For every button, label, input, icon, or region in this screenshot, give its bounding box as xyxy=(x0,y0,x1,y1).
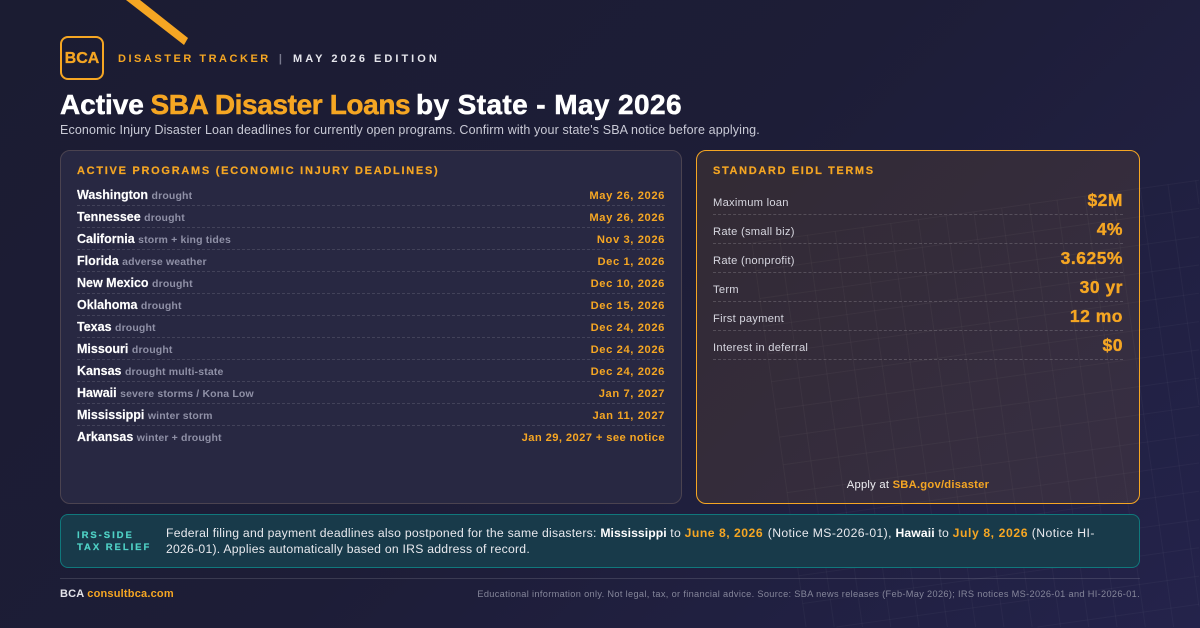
row: Washington: Washington drought xyxy=(77,188,192,202)
diagonal accent bar xyxy=(126,0,188,45)
term: maximum loan: $2M xyxy=(1087,190,1123,210)
term: rate small biz: 4% xyxy=(1097,219,1123,239)
row: Hawaii: Hawaii severe storms / Kona Low xyxy=(77,386,254,400)
callout label xyxy=(77,530,151,553)
row: Mississippi: Mississippi winter storm xyxy=(77,408,213,422)
term: first payment: 12 mo xyxy=(1070,306,1123,326)
row: Arkansas xyxy=(77,430,665,444)
term: maximum loan: Maximum loan xyxy=(713,197,789,209)
row: Washington: May 26, 2026 xyxy=(589,190,665,202)
term: maximum loan xyxy=(713,186,1123,215)
row: Missouri: Missouri drought xyxy=(77,342,173,356)
row: Mississippi xyxy=(77,404,665,426)
row: New Mexico xyxy=(77,272,665,294)
footer disclaimer: Educational information only. Not legal, tax, or financial advice. Source: SBA news releases (Feb-May 2026); IRS notices MS-2026-01 and HI-2026-01. xyxy=(477,589,1140,599)
row: Texas: Dec 24, 2026 xyxy=(591,322,665,334)
panel heading: terms: STANDARD EIDL TERMS xyxy=(713,165,875,177)
row: California xyxy=(77,228,665,250)
logo badge xyxy=(60,36,104,80)
term: rate small biz xyxy=(713,215,1123,244)
eyebrow: DISASTER TRACKER | MAY 2026 EDITION xyxy=(118,53,440,65)
callout label: IRS-SIDE xyxy=(77,530,134,541)
row: Hawaii xyxy=(77,382,665,404)
row: Mississippi: Jan 11, 2027 xyxy=(592,410,665,422)
term: rate nonprofit: Rate (nonprofit) xyxy=(713,255,795,267)
row: Oklahoma xyxy=(77,294,665,316)
term: rate nonprofit xyxy=(713,244,1123,273)
panel: standard EIDL terms xyxy=(696,150,1140,504)
row: Arkansas: Jan 29, 2027 + see notice xyxy=(522,432,665,444)
term: interest in deferral xyxy=(713,331,1123,360)
term: rate nonprofit: 3.625% xyxy=(1061,248,1123,268)
row: Oklahoma: Oklahoma drought xyxy=(77,298,182,312)
row: Florida xyxy=(77,250,665,272)
subtitle: Economic Injury Disaster Loan deadlines for currently open programs. Confirm with your state's SBA notice before applying. xyxy=(60,123,760,137)
callout label: TAX RELIEF xyxy=(77,542,151,553)
term: interest in deferral: Interest in deferral xyxy=(713,342,808,354)
term: term length xyxy=(713,273,1123,302)
row: Texas xyxy=(77,316,665,338)
row: California: California storm + king tides xyxy=(77,232,231,246)
row: Missouri xyxy=(77,338,665,360)
term: first payment: First payment xyxy=(713,313,784,325)
row: New Mexico: New Mexico drought xyxy=(77,276,193,290)
row: Washington xyxy=(77,184,665,206)
row: Texas: Texas drought xyxy=(77,320,156,334)
row: Arkansas: Arkansas winter + drought xyxy=(77,430,222,444)
row: Missouri: Dec 24, 2026 xyxy=(591,344,665,356)
logo badge: BCA xyxy=(65,50,99,67)
callout text: 2026-01). Applies automatically based on IRS address of record. xyxy=(166,542,530,556)
row: California: Nov 3, 2026 xyxy=(597,234,665,246)
row: Kansas xyxy=(77,360,665,382)
row: Tennessee: Tennessee drought xyxy=(77,210,185,224)
panel: active programs xyxy=(60,150,682,504)
term: interest in deferral: $0 xyxy=(1103,335,1123,355)
footer rule xyxy=(60,578,1140,579)
row: Hawaii: Jan 7, 2027 xyxy=(599,388,665,400)
row: Florida: Dec 1, 2026 xyxy=(597,256,665,268)
row: Kansas: Kansas drought multi-state xyxy=(77,364,223,378)
footer brand: BCA consultbca.com xyxy=(60,588,174,600)
term: rate small biz: Rate (small biz) xyxy=(713,226,795,238)
term: term length: 30 yr xyxy=(1080,277,1123,297)
term: first payment xyxy=(713,302,1123,331)
row: Kansas: Dec 24, 2026 xyxy=(591,366,665,378)
title: Active SBA Disaster Loans by State - May 2026 xyxy=(60,89,682,120)
row: New Mexico: Dec 10, 2026 xyxy=(591,278,665,290)
callout: IRS-side tax relief xyxy=(60,514,1140,568)
term: term length: Term xyxy=(713,284,739,296)
apply link: Apply at SBA.gov/disaster xyxy=(847,479,989,491)
row: Tennessee: May 26, 2026 xyxy=(589,212,665,224)
row: Oklahoma: Dec 15, 2026 xyxy=(591,300,665,312)
callout text xyxy=(166,526,1095,556)
row: Florida: Florida adverse weather xyxy=(77,254,207,268)
panel heading: active programs: ACTIVE PROGRAMS (ECONOMIC INJURY DEADLINES) xyxy=(77,165,439,177)
row: Tennessee xyxy=(77,206,665,228)
callout text: Federal filing and payment deadlines also postponed for the same disasters: Mississippi to June 8, 2026 (Notice MS-2026-01), Hawaii to July 8, 2026 (Notice HI- xyxy=(166,526,1095,540)
